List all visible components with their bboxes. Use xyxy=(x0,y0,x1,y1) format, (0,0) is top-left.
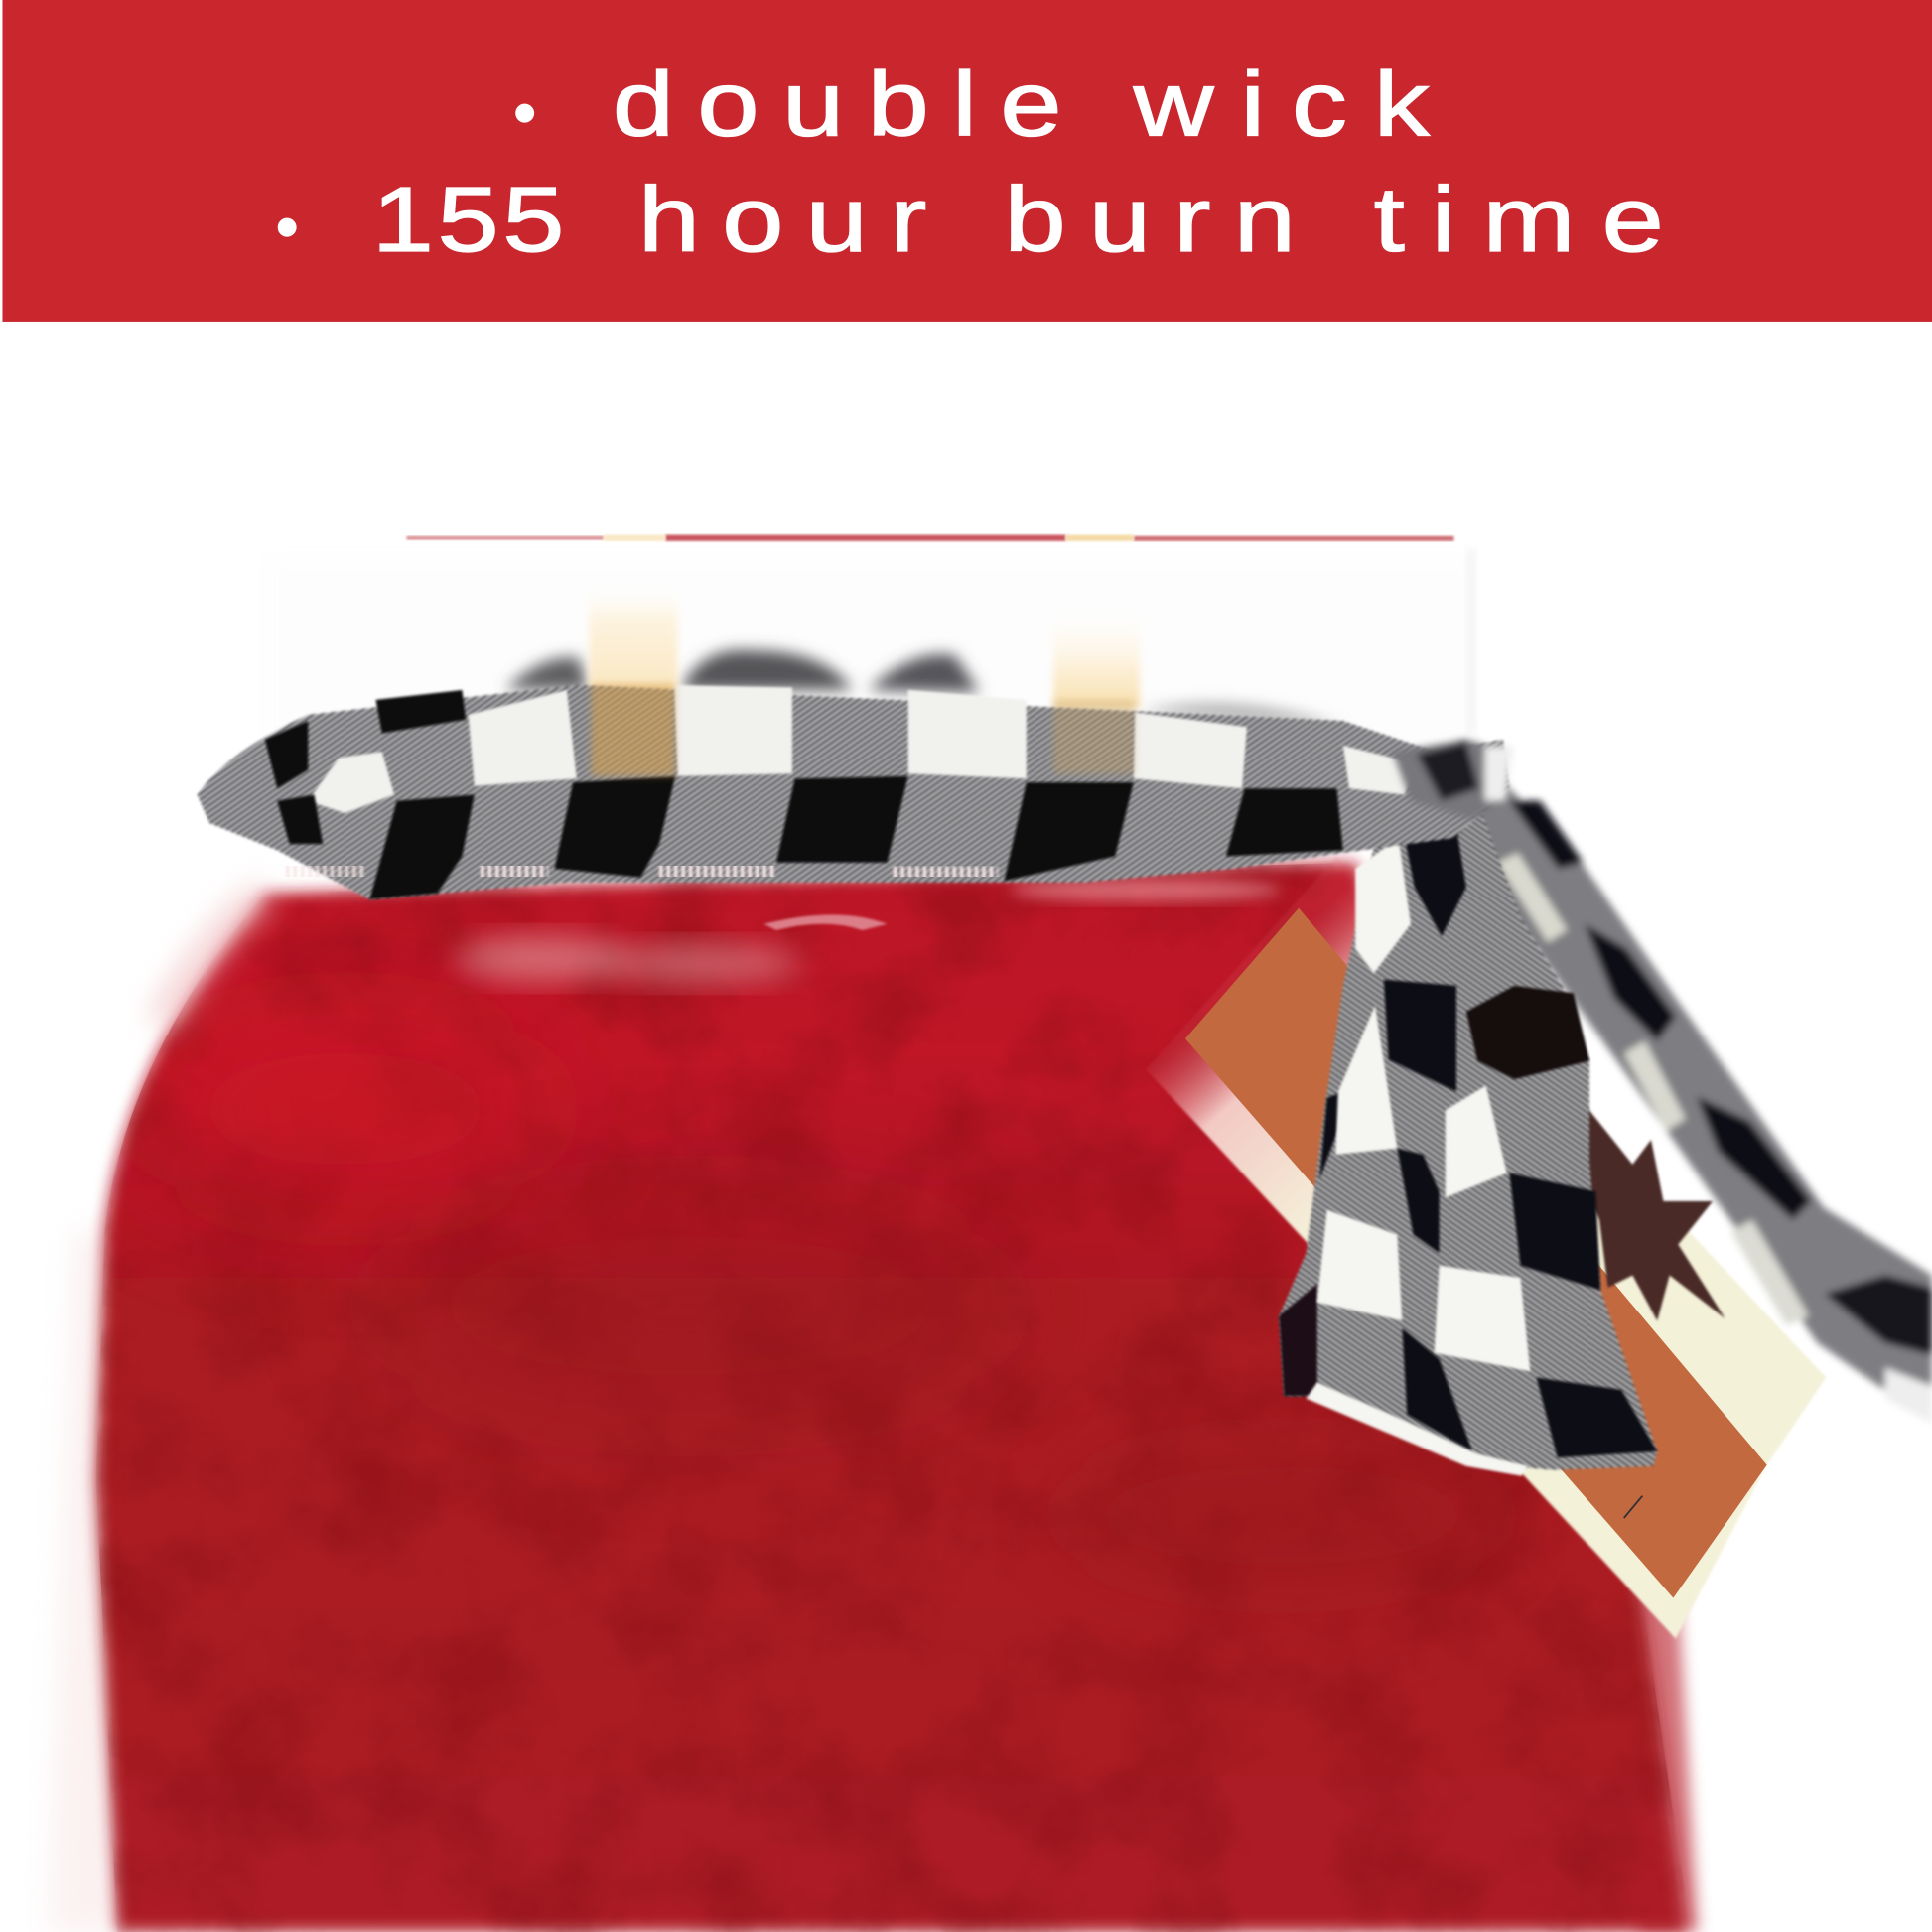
band frayed edge xyxy=(286,868,998,875)
heading line: 155 hour burn time: time xyxy=(1374,168,1664,271)
second ribbon tail xyxy=(1460,740,1932,1423)
glass jar rim and upper glass xyxy=(265,535,1476,763)
heading line: 155 hour burn time: • xyxy=(276,192,298,263)
band candle glow xyxy=(592,684,675,776)
blurred back ribbon seen through glass xyxy=(505,650,1343,727)
wax shoulder highlights xyxy=(160,879,1282,1023)
hanging ribbon xyxy=(1279,801,1657,1476)
heading line: double wick: wick xyxy=(1133,52,1430,155)
heading line: double wick: double xyxy=(613,52,1062,155)
ribbon white checks xyxy=(1307,838,1530,1476)
tag orange panel xyxy=(1185,908,1767,1598)
red wax body xyxy=(73,850,1701,1932)
band base xyxy=(198,685,1509,899)
candle jar photo xyxy=(50,535,1932,1932)
pale haze around jar xyxy=(50,1232,129,1932)
ribbon base xyxy=(1279,801,1657,1470)
heading line: 155 hour burn time: burn xyxy=(1004,168,1296,271)
heading line: 155 hour burn time: 155 xyxy=(372,168,564,271)
ribbon black checks xyxy=(1279,813,1657,1457)
star charm xyxy=(1578,1103,1725,1320)
heading line: double wick: • xyxy=(513,76,536,148)
knot of ribbon xyxy=(1392,740,1513,819)
gingham ribbon band around jar neck xyxy=(198,684,1509,899)
heading line: double wick xyxy=(513,52,1430,155)
kraft hang tag xyxy=(1146,857,1826,1639)
header banner xyxy=(2,0,1932,322)
band black checks xyxy=(265,690,1343,899)
candle flames xyxy=(589,579,1140,709)
jar glass on right below tag xyxy=(1626,1578,1698,1932)
heading line: 155 hour burn time xyxy=(276,168,1664,271)
tag cream card xyxy=(1146,857,1826,1639)
tag string xyxy=(1624,1496,1642,1518)
heading line: 155 hour burn time: hour xyxy=(638,168,926,271)
band white checks xyxy=(308,685,1417,813)
